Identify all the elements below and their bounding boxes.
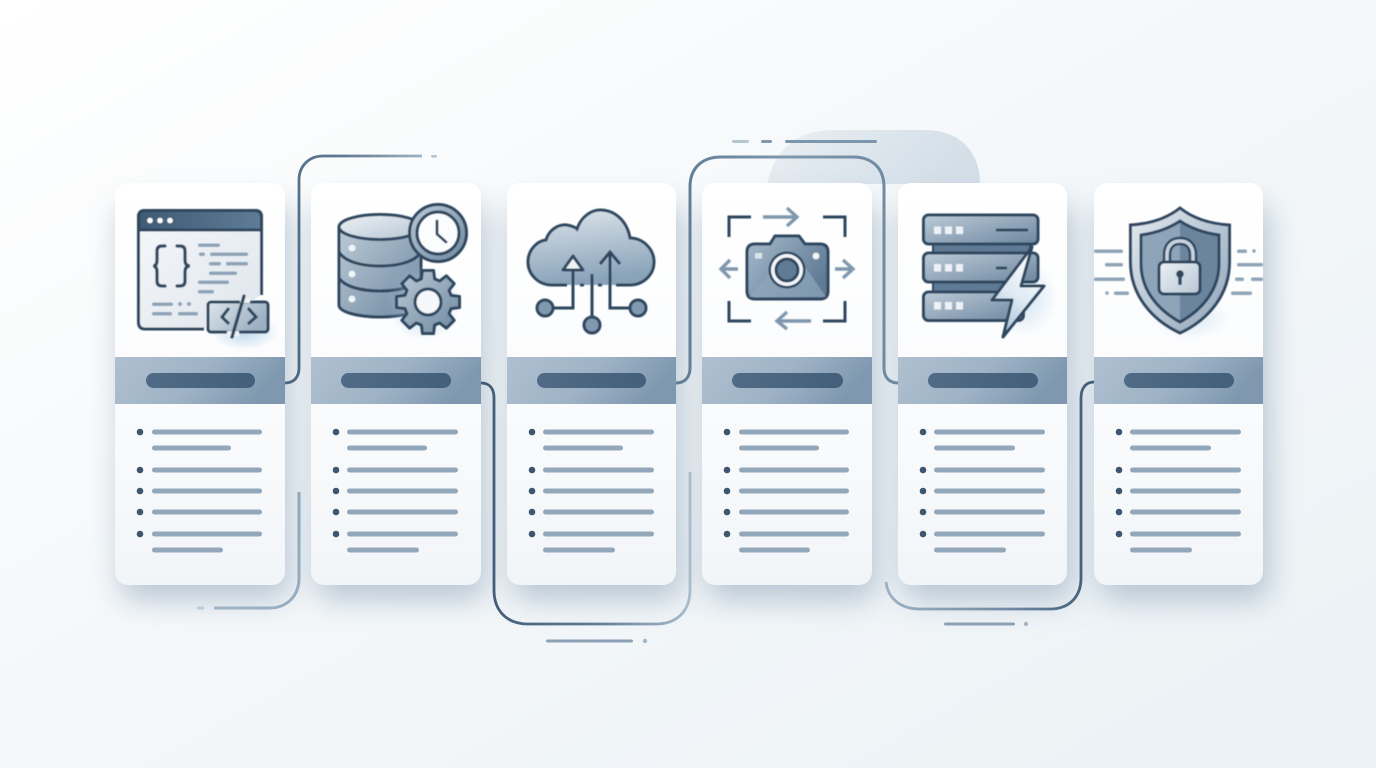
panel: card 6 security [1094, 183, 1263, 585]
icon: server rack with lightning bolt [924, 215, 1058, 337]
bullet list [529, 429, 654, 552]
decorative backdrop shape [767, 130, 980, 184]
heading placeholder [732, 373, 843, 388]
card body [115, 183, 285, 585]
connector: card 1 lower curve [197, 492, 299, 610]
header band [507, 357, 676, 404]
panel: card 4 camera [702, 183, 872, 585]
icon: camera with frame and arrows [721, 208, 853, 329]
bullet list [137, 429, 262, 552]
header band [702, 357, 872, 404]
bullet list [920, 429, 1045, 552]
panel: card 3 cloud [507, 183, 676, 585]
panel: card 2 database [311, 183, 481, 585]
icon: database with clock and gear [339, 204, 466, 341]
panel: card 1 code [115, 183, 285, 585]
dash below card 3 [546, 639, 647, 643]
heading placeholder [341, 373, 451, 388]
header band [898, 357, 1067, 404]
card body [898, 183, 1067, 585]
header band [115, 357, 285, 404]
bullet list [333, 429, 458, 552]
icon: cloud network [528, 210, 654, 333]
connector: card 5 bottom to card 6 [886, 382, 1094, 609]
heading placeholder [537, 373, 646, 388]
panel: card 5 server [898, 183, 1067, 585]
heading placeholder [928, 373, 1038, 388]
card body [702, 183, 872, 585]
top dashes [732, 140, 877, 143]
dash below card 5 [944, 622, 1028, 626]
bullet list [724, 429, 849, 552]
connector: card 2 around bottom of card 3 [481, 383, 690, 624]
card shadows [120, 205, 1269, 600]
card body [1094, 183, 1263, 585]
connector: card 3 over top of card 4 to card 5 [676, 157, 898, 383]
icon: code window [138, 210, 279, 350]
bullet list [1116, 429, 1241, 552]
icon: shield with padlock [1094, 208, 1263, 340]
header band [1094, 357, 1263, 404]
heading placeholder [146, 373, 255, 388]
heading placeholder [1124, 373, 1234, 388]
connector: card 1 up to top line [285, 155, 437, 383]
header band [311, 357, 481, 404]
card body [507, 183, 676, 585]
card body [311, 183, 481, 585]
